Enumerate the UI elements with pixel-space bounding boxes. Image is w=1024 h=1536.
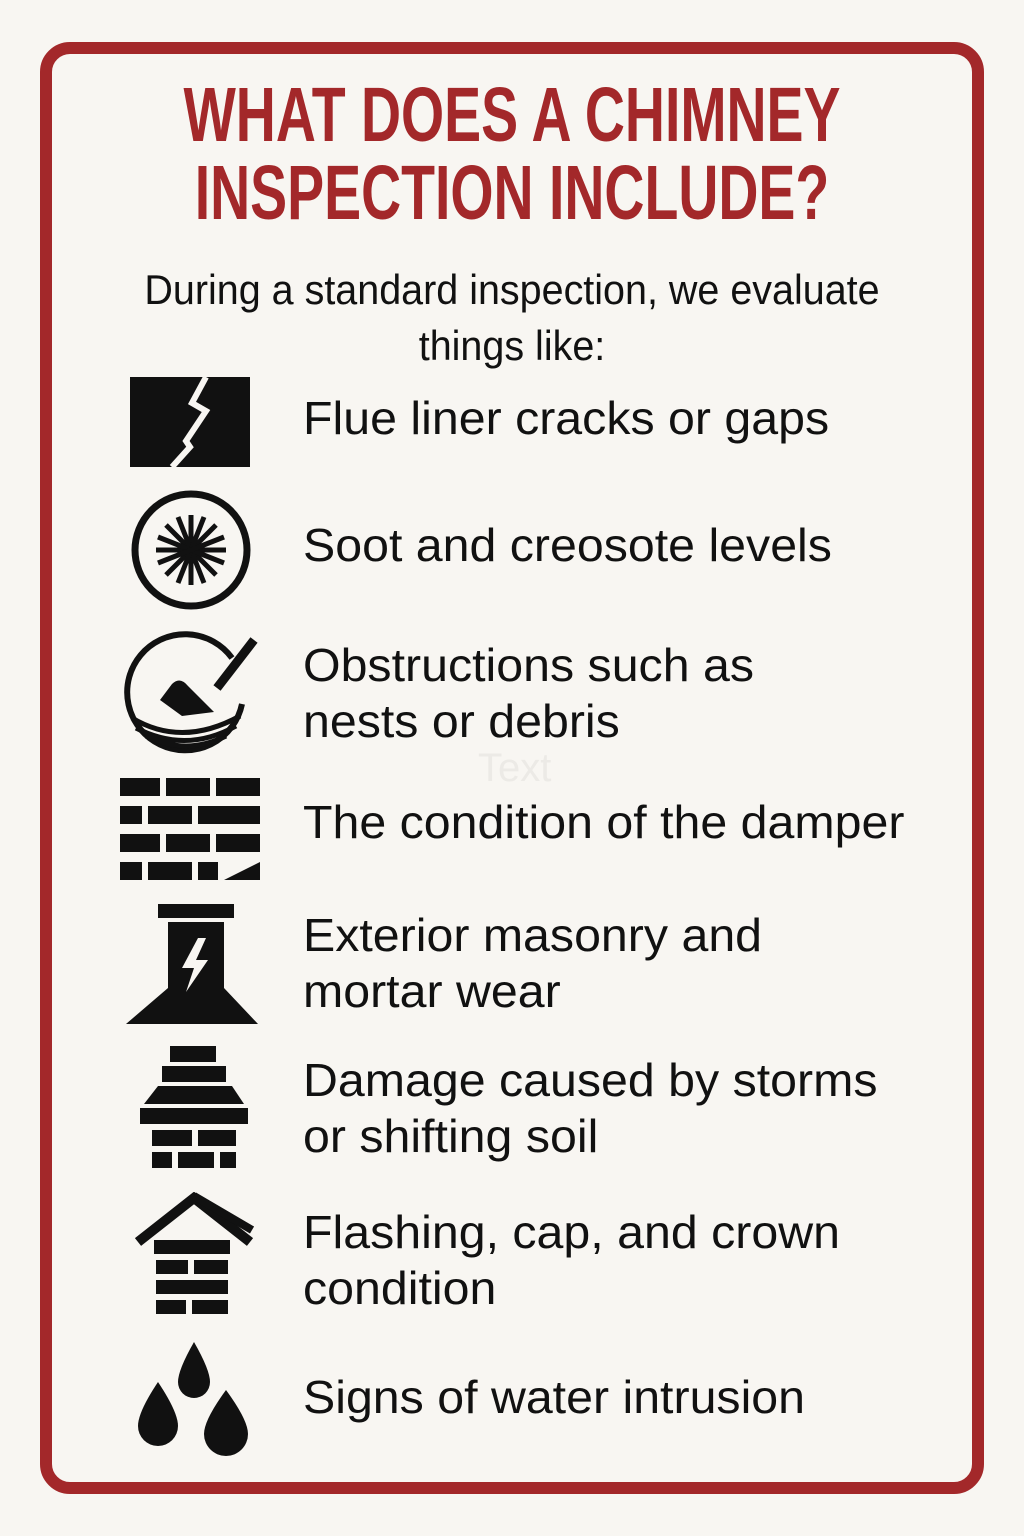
text: Signs of water intrusion <box>303 1371 805 1423</box>
text: Flue liner cracks or gaps <box>303 392 829 444</box>
faint text: Text <box>478 746 551 790</box>
icon: cracked liner <box>130 377 250 467</box>
text: condition <box>303 1262 496 1314</box>
title <box>183 72 841 236</box>
text: nests or debris <box>303 695 620 747</box>
subtitle: During a standard inspection, we evaluate <box>144 266 880 313</box>
text: Soot and creosote levels <box>303 519 832 571</box>
title: INSPECTION INCLUDE? <box>195 150 829 236</box>
text: The condition of the damper <box>303 796 904 848</box>
icon: chimney bricks <box>140 1046 248 1168</box>
text: Damage caused by storms <box>303 1054 877 1106</box>
icon: roof flashing <box>135 1192 254 1314</box>
text: or shifting soil <box>303 1110 598 1162</box>
icon: soot <box>132 490 250 610</box>
icon: water drops <box>138 1342 248 1456</box>
subtitle <box>144 266 880 369</box>
text: Obstructions such as <box>303 639 754 691</box>
title: WHAT DOES A CHIMNEY <box>183 72 841 158</box>
subtitle: things like: <box>419 322 605 369</box>
icon: brick damper <box>120 778 260 880</box>
text: Exterior masonry and <box>303 909 762 961</box>
icon: chimney lightning <box>126 904 258 1024</box>
text: mortar wear <box>303 965 561 1017</box>
icon: bird nest <box>124 631 258 754</box>
text: Flashing, cap, and crown <box>303 1206 840 1258</box>
